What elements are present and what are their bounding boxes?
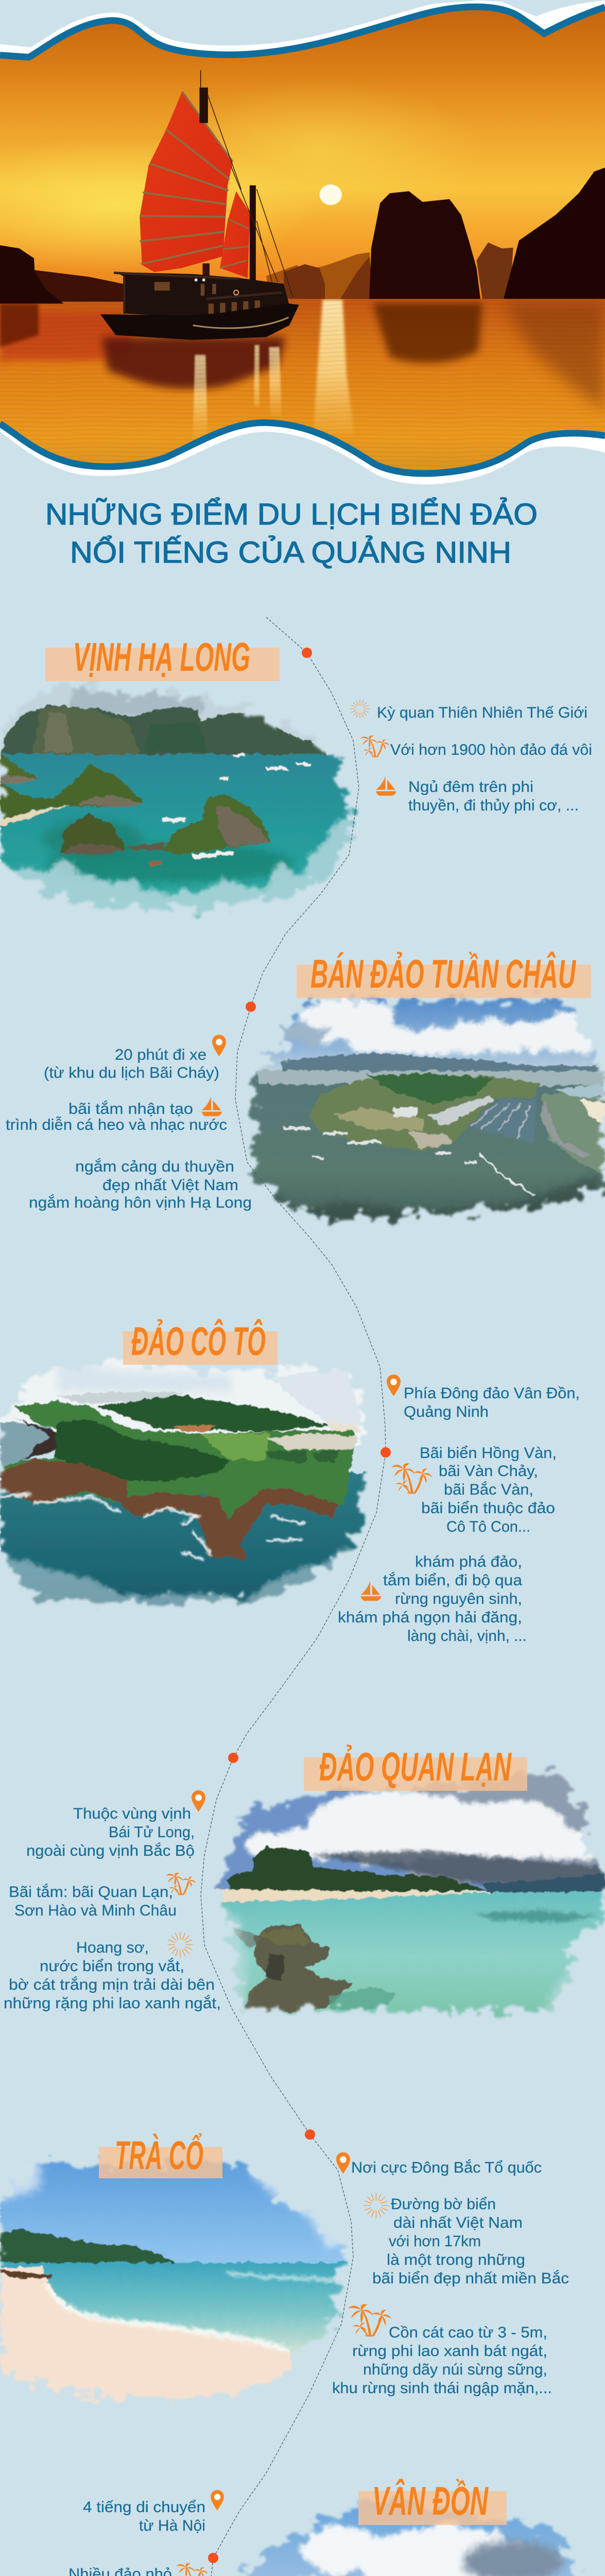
info: Trà Cổ [332, 2153, 569, 2397]
right shore [540, 1088, 605, 1174]
info: Bán đảo Tuần Châu [6, 1035, 252, 1211]
photo: Đảo Cô Tô [0, 1343, 405, 1631]
distant limestone hills [266, 252, 370, 299]
info: Bán đảo Tuần Châu: ngắm hoàng hôn vịnh Hạ Long [29, 1194, 252, 1211]
info: Vịnh Hạ Long: thuyền, đi thủy phi cơ, ... [408, 797, 579, 814]
distant karst mountains [0, 705, 328, 754]
info: Đảo Quan Lạn: ngoài cùng vịnh Bắc Bộ [26, 1842, 195, 1859]
marina [467, 1099, 537, 1143]
pale flats [258, 1071, 605, 1086]
info: Đảo Cô Tô: Cô Tô Con... [446, 1518, 530, 1535]
info: Đảo Quan Lạn: Bái Tử Long, [109, 1824, 195, 1841]
masts and rigging [201, 70, 293, 298]
wooden boat [0, 2269, 52, 2279]
sea [0, 2263, 386, 2353]
title: NHỮNG ĐIỂM DU LỊCH BIỂN ĐẢO [45, 498, 538, 531]
info: Đảo Cô Tô: khám phá ngọn hải đăng, [338, 1609, 522, 1626]
sea [0, 299, 605, 484]
sun reflection [314, 300, 354, 434]
info: Đảo Cô Tô: Phía Đông đảo Vân Đồn, [404, 1385, 580, 1402]
tree line [226, 1847, 490, 1891]
info: Đảo Quan Lạn: Sơn Hào và Minh Châu [14, 1902, 177, 1919]
sand beach [0, 2267, 301, 2415]
info: Đảo Quan Lạn [4, 1790, 221, 2012]
central peninsula [309, 1076, 540, 1150]
hero scene [0, 0, 605, 484]
sea [216, 1892, 605, 2020]
info: Trà Cổ: khu rừng sinh thái ngập mặn,... [332, 2380, 552, 2397]
info: Đảo Cô Tô [338, 1375, 580, 1645]
front left islet [61, 814, 127, 855]
sea [0, 1473, 405, 1631]
info: Trà Cổ: những dãy núi sừng sững, [363, 2361, 547, 2378]
big rock [369, 191, 480, 299]
info: Đảo Cô Tô: bãi Bắc Vàn, [444, 1481, 533, 1498]
right rock [504, 167, 605, 299]
clouds [243, 1790, 602, 1865]
info: Bán đảo Tuần Châu: ngắm cảng du thuyền [75, 1158, 234, 1175]
water [232, 1071, 605, 1236]
left hills [34, 270, 127, 301]
mountain range [282, 1053, 605, 1072]
boat reflection [102, 337, 286, 388]
route stops [208, 648, 391, 2576]
main sail [140, 92, 233, 272]
bottom wave line [0, 422, 605, 473]
info: Đảo Quan Lạn: bờ cát trắng mịn trải dài bên [9, 1976, 215, 1993]
info: Bán đảo Tuần Châu: đẹp nhất Việt Nam [102, 1177, 238, 1194]
title [45, 498, 538, 569]
info: Trà Cổ: rừng phi lao xanh bát ngát, [352, 2343, 547, 2360]
info: Trà Cổ: với hơn 17km [389, 2233, 481, 2250]
photo: Vịnh Hạ Long [0, 669, 405, 920]
info: Bán đảo Tuần Châu: (từ khu du lịch Bãi Cháy) [44, 1064, 219, 1081]
heading: Vân Đồn [358, 2478, 507, 2525]
info: Vịnh Hạ Long: Ngủ đêm trên phi [408, 778, 533, 795]
info: Đảo Cô Tô: bãi biển thuộc đảo [421, 1500, 555, 1517]
brown cliffs [0, 1459, 339, 1560]
beach [216, 1889, 494, 1907]
info: Đảo Quan Lạn: những rặng phi lao xanh ngắt, [4, 1995, 221, 2012]
white top wave strip [0, 1, 605, 63]
heading: Vịnh Hạ Long: VỊNH HẠ LONG [73, 634, 250, 680]
heading: Trà Cổ: TRÀ CỔ [115, 2132, 203, 2178]
white brush lower edge [0, 807, 359, 918]
hero: sunset junk boat on Ha Long Bay [0, 0, 605, 484]
info: Bán đảo Tuần Châu: bãi tắm nhận tạo [68, 1100, 193, 1117]
sky [193, 2486, 605, 2576]
sun [320, 184, 342, 205]
top wave line [0, 7, 605, 57]
heading: Vân Đồn: VÂN ĐỒN [372, 2478, 489, 2523]
info: Trà Cổ: Cồn cát cao từ 3 - 5m, [389, 2324, 547, 2341]
photo: Trà Cổ [0, 2155, 386, 2415]
info: Đảo Cô Tô: rừng nguyên sinh, [395, 1590, 522, 1607]
info: Đảo Cô Tô: Quảng Ninh [404, 1403, 489, 1420]
forested headland [0, 2229, 176, 2265]
info: Vân Đồn: từ Hà Nội [139, 2517, 205, 2534]
info: Bán đảo Tuần Châu: 20 phút đi xe [115, 1046, 206, 1063]
white bottom wave strip [0, 410, 605, 484]
photo: Bán đảo Tuần Châu [232, 989, 605, 1236]
info: Trà Cổ: Đường bờ biển [391, 2196, 496, 2213]
boat hull [100, 303, 299, 340]
boats [284, 1126, 477, 1163]
heading: Trà Cổ [99, 2132, 222, 2178]
info: Vịnh Hạ Long: Với hơn 1900 hòn đảo đá vôi [390, 741, 592, 758]
info: Trà Cổ: là một trong những [387, 2251, 525, 2268]
boats [163, 754, 312, 858]
heading: Vịnh Hạ Long [45, 634, 280, 681]
info: Trà Cổ: Nơi cực Đông Bắc Tổ quốc [351, 2159, 542, 2176]
sky [232, 989, 605, 1076]
sky [0, 0, 605, 303]
info: Đảo Cô Tô: bãi Vàn Chảy, [439, 1463, 538, 1480]
small sail [220, 191, 250, 278]
info: Vân Đồn: 4 tiếng di chuyển [83, 2499, 205, 2516]
main island green [0, 1401, 355, 1520]
sky [193, 1752, 605, 1890]
info: Đảo Quan Lạn: Bãi tắm: bãi Quan Lạn, [9, 1884, 173, 1901]
title: NỔI TIẾNG CỦA QUẢNG NINH [70, 536, 511, 569]
back hills [96, 1395, 328, 1432]
haze sky [0, 669, 405, 760]
info: Đảo Cô Tô: tắm biển, đi bộ qua [383, 1572, 522, 1589]
far headland [482, 1874, 605, 1892]
info: Đảo Cô Tô: làng chài, vịnh, ... [407, 1628, 527, 1645]
heading: Đảo Cô Tô: ĐẢO CÔ TÔ [131, 1318, 266, 1364]
info: Vân Đồn [26, 2490, 224, 2576]
surf foam [0, 1495, 305, 1560]
distant bay [56, 1391, 185, 1404]
bay water [0, 754, 405, 920]
info: Trà Cổ: bãi biển đẹp nhất miền Bắc [372, 2270, 569, 2287]
boat cabin [114, 272, 290, 317]
sky and clouds [0, 1343, 405, 1446]
dark brush bottom [263, 1174, 605, 1226]
left island [0, 754, 39, 783]
info: Vịnh Hạ Long: Kỳ quan Thiên Nhiên Thế Giới [377, 704, 587, 721]
photo: Vân Đồn [193, 2486, 605, 2576]
info: Đảo Cô Tô: khám phá đảo, [415, 1553, 522, 1570]
info: Trà Cổ: dài nhất Việt Nam [393, 2214, 523, 2231]
photo: Đảo Quan Lạn [193, 1752, 605, 2020]
info: Đảo Quan Lạn: Hoang sơ, [76, 1939, 149, 1956]
info: Đảo Quan Lạn: nước biển trong vắt, [40, 1958, 184, 1975]
info: Vịnh Hạ Long [351, 700, 592, 814]
sky [0, 2155, 386, 2269]
info: Bán đảo Tuần Châu: trình diễn cá heo và nhạc nước [6, 1116, 227, 1133]
front right islet [162, 794, 270, 855]
middle island [0, 765, 143, 819]
dashed route [201, 617, 386, 2576]
heading: Đảo Quan Lạn [304, 1744, 527, 1791]
info: Đảo Quan Lạn: Thuộc vùng vịnh [73, 1805, 191, 1822]
clouds [282, 996, 602, 1056]
coral rock [243, 1925, 353, 2012]
clouds [247, 2526, 575, 2576]
heading: Đảo Cô Tô [123, 1318, 278, 1365]
info: Đảo Cô Tô: Bãi biển Hồng Vàn, [420, 1445, 557, 1462]
